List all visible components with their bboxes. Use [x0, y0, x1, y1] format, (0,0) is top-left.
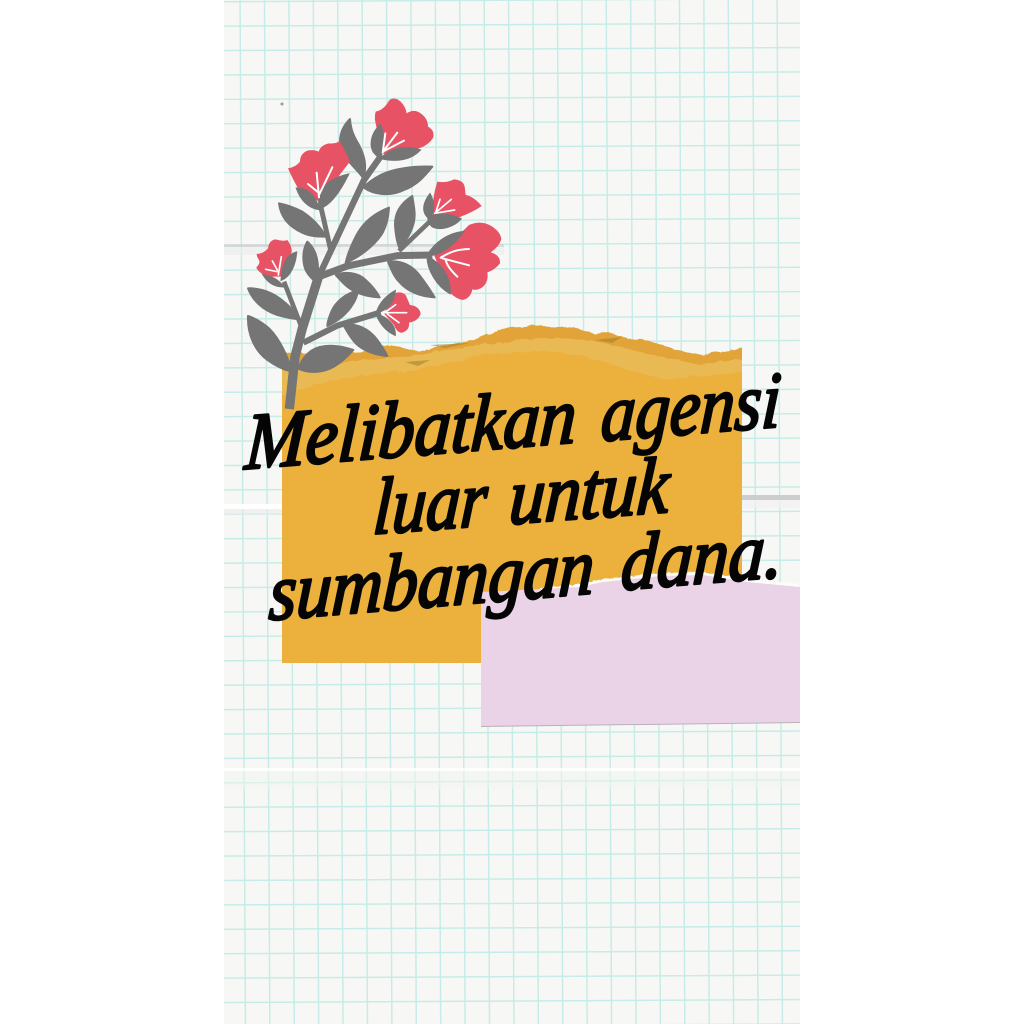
torn pink paper panel: [481, 572, 800, 726]
graph paper background: [224, 0, 800, 1024]
heading line 1: [242, 355, 784, 487]
main handwritten heading: [242, 355, 786, 638]
heading line 1: agensi: [599, 355, 784, 459]
illustration: flower branch: [248, 99, 501, 409]
heading line 2: luar: [371, 454, 491, 552]
main orange fill under torn edge: [282, 350, 742, 401]
heading line 3: sumbangan: [267, 522, 597, 638]
flower: top: [371, 99, 434, 160]
stems: [284, 157, 432, 409]
heading line 2: untuk: [507, 441, 673, 542]
torn edge: pale inner band: [270, 338, 750, 396]
flower: large right: [427, 223, 501, 300]
heading line 2: [371, 441, 673, 552]
flower: right upper: [424, 179, 482, 228]
leaves: [248, 119, 435, 372]
torn orange paper panel: [270, 326, 750, 663]
flower: bottom: [376, 291, 421, 335]
heading line 1: Melibatkan: [242, 371, 579, 487]
torn edge: darker outer band: [270, 326, 750, 400]
heading line 3: [267, 505, 786, 638]
flower: small left: [256, 239, 296, 287]
flower: upper left: [288, 141, 350, 209]
heading line 3: dana.: [619, 505, 786, 608]
infographic canvas: [224, 0, 800, 1024]
